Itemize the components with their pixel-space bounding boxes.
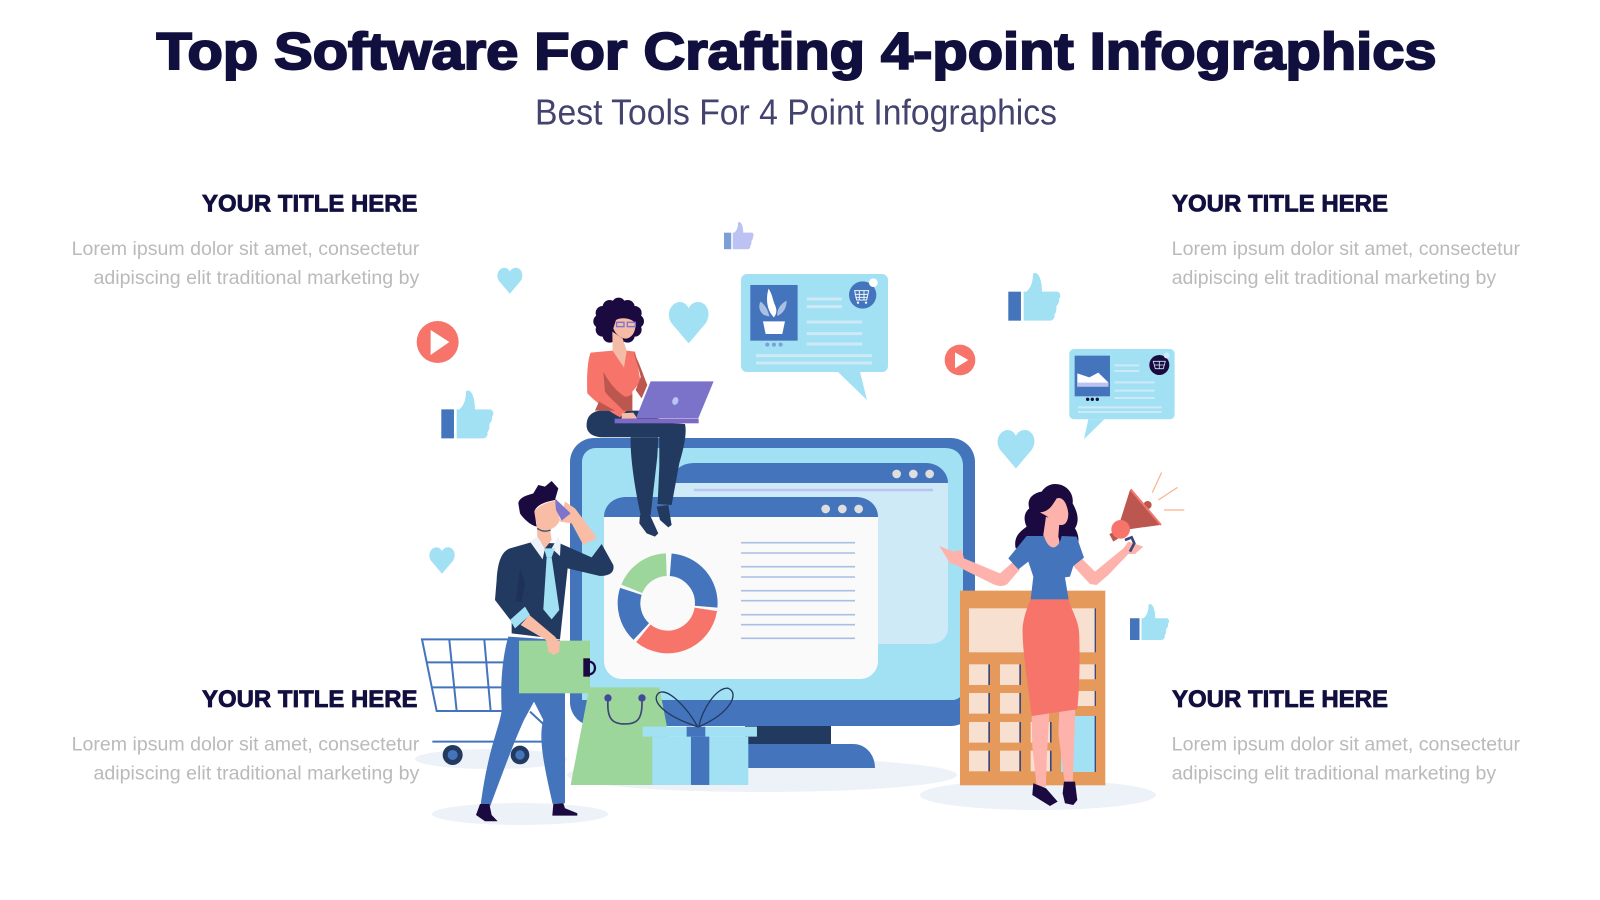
woman's feet bbox=[639, 505, 672, 537]
shoes bbox=[1032, 782, 1077, 806]
monitor screen bbox=[582, 448, 963, 700]
monitor stand bbox=[735, 726, 875, 768]
tie bbox=[543, 548, 559, 619]
text lines bbox=[741, 543, 855, 638]
speech bubble: plant product bbox=[741, 274, 888, 400]
panel: top right bbox=[1172, 190, 1521, 289]
speech bubble: shoe product bbox=[1069, 349, 1175, 439]
neck and face bbox=[612, 318, 635, 367]
icon: thumbs up right bbox=[1008, 273, 1060, 321]
panel: bottom right bbox=[1172, 686, 1521, 784]
body text: Lorem ipsum dolor sit amet, consectetur bbox=[1172, 734, 1521, 756]
skirt bbox=[1023, 599, 1080, 716]
monitor frame bbox=[570, 438, 975, 726]
lower arm bbox=[521, 615, 560, 655]
title: Top Software For Crafting 4-point Infographics bbox=[156, 22, 1436, 80]
body text bbox=[72, 238, 420, 289]
icon: play button right bbox=[945, 345, 975, 375]
body text bbox=[1172, 734, 1521, 784]
body text: adipiscing elit traditional marketing by bbox=[1172, 762, 1496, 784]
body text bbox=[72, 734, 420, 784]
calculator bbox=[960, 591, 1105, 785]
hair bbox=[1015, 484, 1078, 548]
sweater shading bbox=[595, 352, 647, 411]
icon: play button left bbox=[417, 321, 459, 363]
woman with laptop bbox=[587, 298, 714, 515]
body text: adipiscing elit traditional marketing by bbox=[94, 267, 420, 289]
collar bbox=[530, 537, 561, 559]
hair bbox=[593, 298, 644, 344]
body text: Lorem ipsum dolor sit amet, consectetur bbox=[1172, 238, 1521, 260]
hand bbox=[622, 413, 637, 419]
icon: heart top left bbox=[497, 268, 522, 294]
laptop bbox=[615, 381, 714, 423]
legs bbox=[1032, 710, 1075, 787]
shopping cart bbox=[422, 639, 543, 765]
panel: bottom left bbox=[72, 686, 420, 784]
body text: adipiscing elit traditional marketing by bbox=[94, 762, 420, 784]
icon: heart right bbox=[998, 430, 1034, 468]
icon: heart lower left bbox=[429, 547, 455, 574]
folder bbox=[519, 641, 590, 693]
donut chart bbox=[629, 565, 706, 642]
back window bbox=[673, 463, 948, 644]
icon: heart large bbox=[669, 302, 709, 343]
body text: Lorem ipsum dolor sit amet, consectetur bbox=[72, 734, 420, 756]
glasses bbox=[617, 322, 635, 327]
icon: thumbs up left bbox=[441, 391, 493, 438]
trousers bbox=[481, 637, 565, 807]
jacket bbox=[495, 543, 614, 639]
gift box bbox=[643, 688, 757, 785]
icon: thumbs up lower right bbox=[1130, 604, 1169, 640]
monitor bbox=[570, 438, 975, 768]
woman with megaphone bbox=[939, 472, 1184, 806]
neck bbox=[537, 523, 552, 548]
front window bbox=[604, 497, 878, 679]
body text: Lorem ipsum dolor sit amet, consectetur bbox=[72, 238, 420, 260]
sweater bbox=[587, 351, 641, 417]
phone bbox=[555, 498, 571, 521]
phone arm bbox=[560, 502, 597, 545]
face bbox=[1040, 498, 1068, 525]
heading: YOUR TITLE HERE bbox=[202, 190, 418, 217]
heading: YOUR TITLE HERE bbox=[202, 686, 418, 713]
arms bbox=[939, 546, 1020, 586]
trousers bbox=[587, 411, 686, 515]
head bbox=[533, 501, 560, 530]
shoes bbox=[476, 803, 577, 821]
panel: top left bbox=[72, 190, 420, 289]
shopping bag bbox=[571, 687, 678, 785]
heading: YOUR TITLE HERE bbox=[1172, 190, 1388, 217]
ground shadows bbox=[415, 749, 1156, 825]
man on phone bbox=[476, 481, 614, 821]
icon: thumbs up lavender bbox=[724, 222, 754, 249]
hair bbox=[518, 481, 558, 527]
sound rays bbox=[1152, 472, 1184, 510]
neck bbox=[1043, 517, 1059, 549]
shirt bbox=[1008, 536, 1084, 599]
subtitle: Best Tools For 4 Point Infographics bbox=[535, 92, 1057, 132]
heading: YOUR TITLE HERE bbox=[1172, 686, 1388, 713]
megaphone bbox=[1109, 489, 1161, 552]
body text: adipiscing elit traditional marketing by bbox=[1172, 267, 1496, 289]
body text bbox=[1172, 238, 1521, 289]
